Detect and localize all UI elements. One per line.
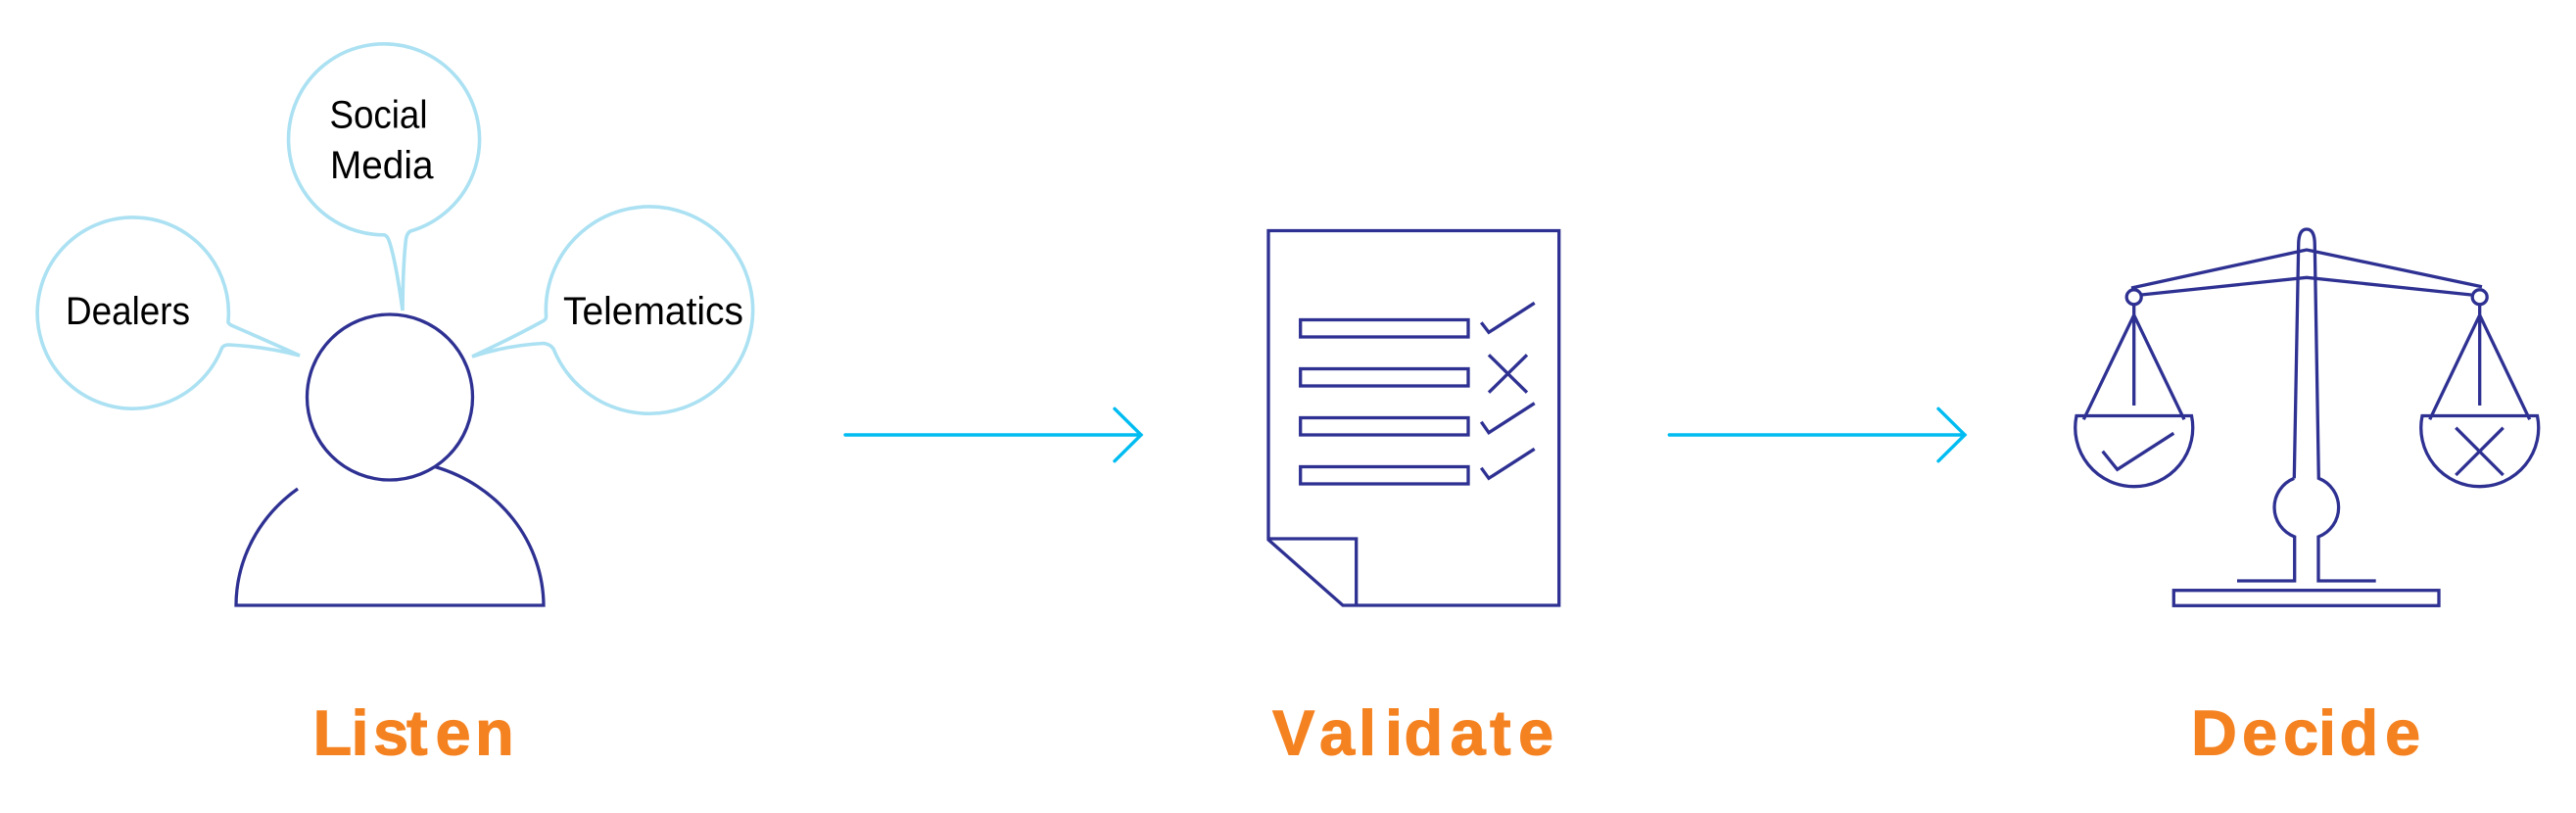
speech bubble: telematics: Telematics [563, 290, 743, 333]
speech bubble: telematics [472, 207, 753, 413]
heading: listen: Listen [313, 697, 514, 769]
icon: balance scale [2075, 229, 2539, 605]
panel: decide [2075, 229, 2539, 769]
arrow: validate to decide [1669, 408, 1965, 461]
speech bubble: social media: Social [329, 94, 427, 137]
speech bubble: dealers: Dealers [66, 290, 190, 333]
heading: decide: Decide [2191, 697, 2420, 769]
speech bubble: dealers [37, 217, 300, 408]
panel: validate [1268, 231, 1559, 769]
icon: checklist document [1268, 231, 1559, 605]
speech bubble: social media [289, 44, 480, 311]
heading: validate: Validate [1272, 697, 1553, 769]
arrow: listen to validate [845, 408, 1141, 461]
speech bubble: social media: Media [330, 144, 434, 187]
panel: listen [37, 44, 753, 769]
icon: person [236, 314, 544, 605]
